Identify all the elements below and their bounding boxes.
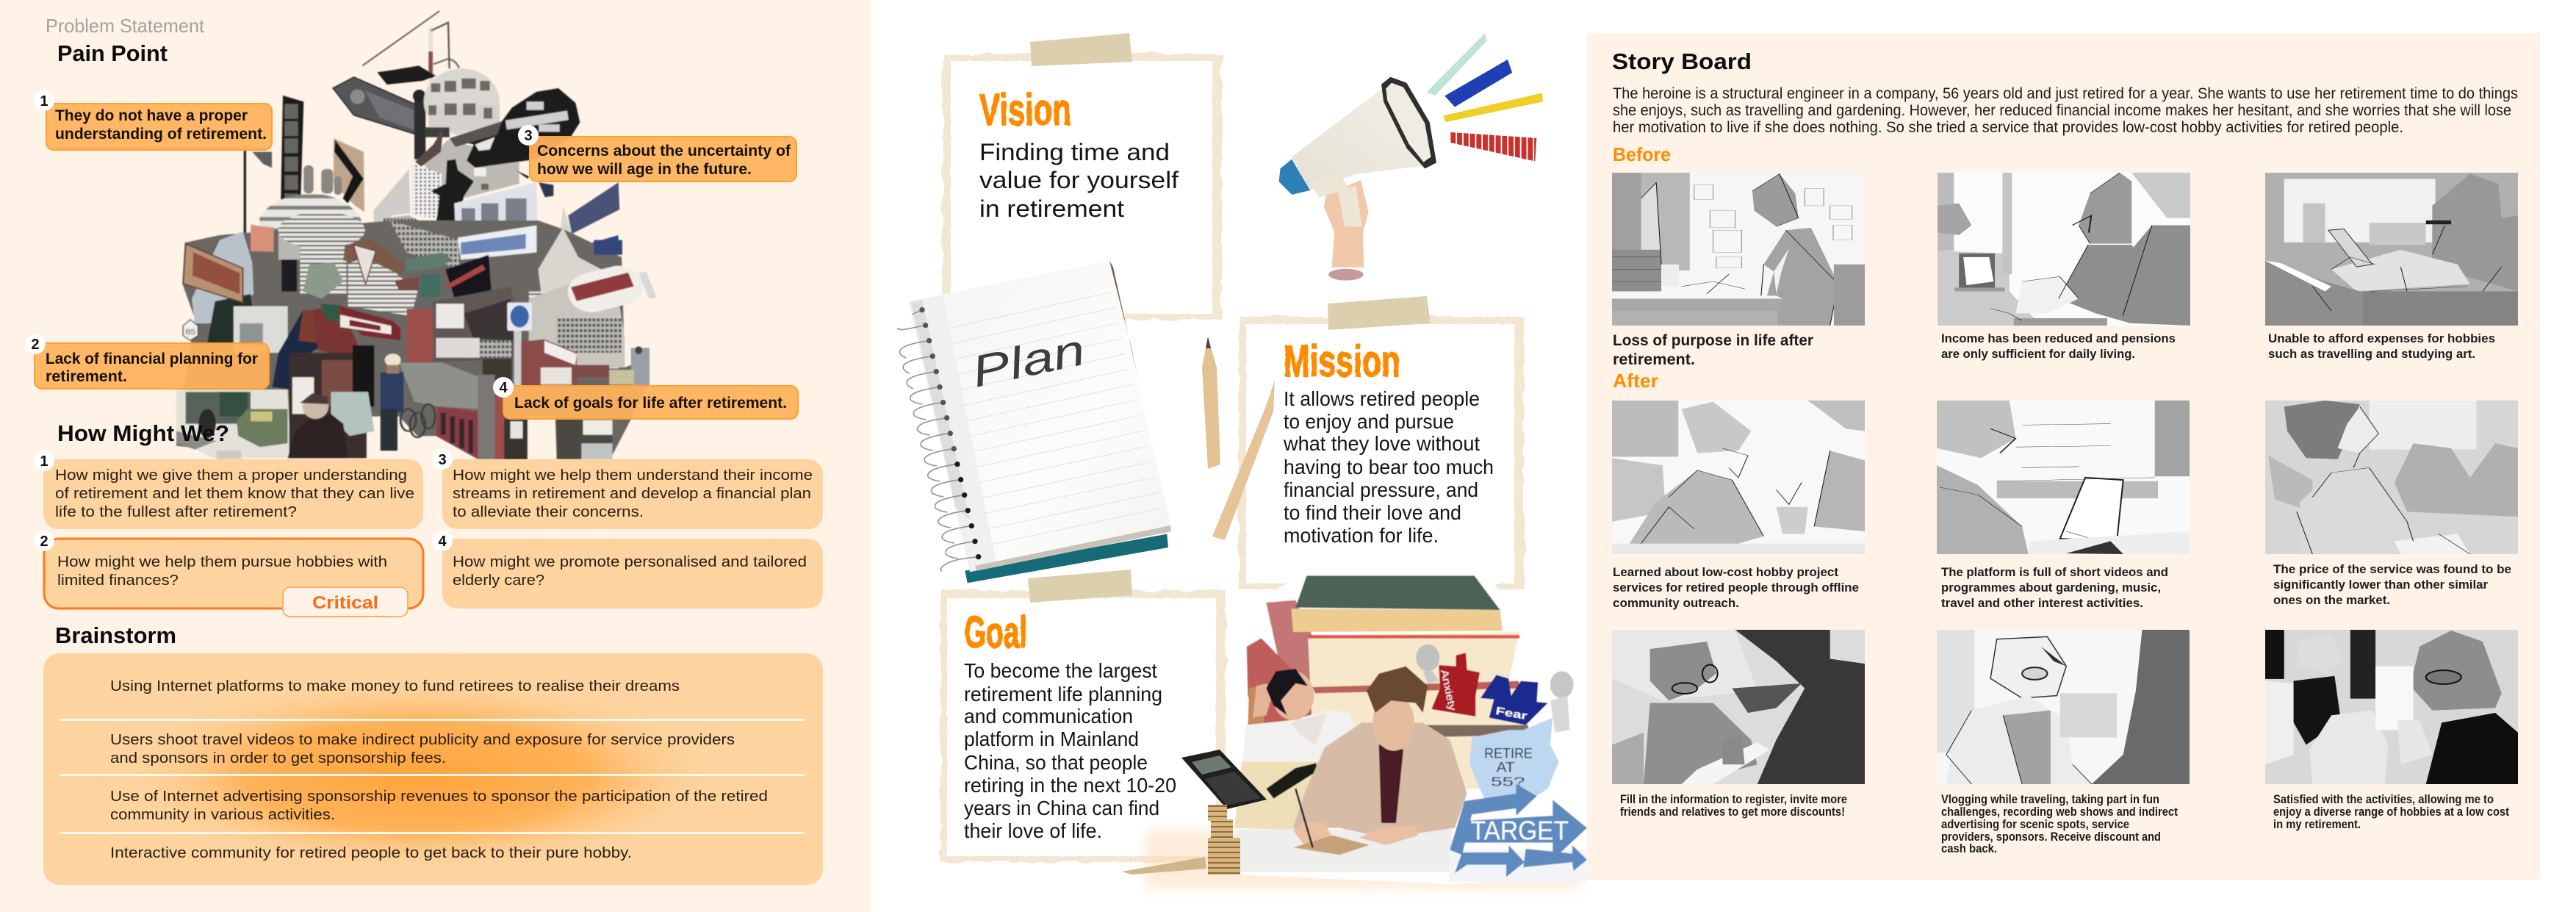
caption [1941,566,2168,610]
caption [1941,793,2178,855]
HMW card 3: 3 [438,452,447,468]
callout 4: Lack of goals for life after retirement. [514,395,787,412]
intro text: The heroine is a structural engineer in a company, 56 years old and just retired for a year. She wants to use her retirement time to do things [1613,85,2518,102]
intro text: her motivation to live if she does nothing. So she tried a service that provides low-cost hobby activities for retired people. [1613,119,2403,136]
caption [2273,563,2511,607]
illustration: books, people and goals collage [1146,573,1587,889]
icon: spiral notebook with Plan [897,261,1172,583]
piggy bank: retire at 55: AT [1497,761,1515,776]
callout 1: 1 [40,93,48,109]
caption: travel and other interest activities. [1941,597,2143,610]
body: retirement life planning [964,683,1162,705]
panel: brainstorm ideas [43,610,823,912]
sketch frame: after 3 [2265,401,2518,554]
section label: Problem Statement: Problem Statement [46,15,205,37]
icon: megaphone [1279,33,1543,281]
black sign [450,88,580,168]
grey building below black sign [424,140,519,201]
caption [2273,793,2509,831]
body: retiring in the next 10-20 [964,774,1176,797]
callout 3: 3 [524,128,533,144]
caption: Vlogging while traveling, taking part in fun [1941,793,2159,806]
HMW card 1: 1 [40,453,48,470]
sketch frame: after 5 [1937,630,2190,784]
HMW card 2 critical: limited finances? [57,572,179,589]
caption: Learned about low-cost hobby project [1613,566,1839,579]
icon: calculator [1181,750,1267,809]
body: their love of life. [964,819,1102,842]
caption: friends and relatives to get more discounts! [1620,805,1845,819]
heading: Pain Point: Pain Point [57,40,168,66]
callout 3: how we will age in the future. [537,161,752,178]
puzzle piece: Anxiety: Anxiety [1439,669,1458,711]
callout 2: Lack of financial planning for [46,351,258,367]
HMW card 4 [432,531,823,608]
caption [1613,566,1859,610]
body: To become the largest [964,659,1157,682]
arrows: target: TARGET [1471,816,1569,846]
callout 1: They do not have a proper [55,107,248,124]
left panel background [0,0,871,912]
panel: brainstorm ideas: Using Internet platforms to make money to fund retirees to realise their dreams [110,678,680,694]
sketch frame: after 6 [2265,630,2518,784]
heading: Story Board: Story Board [1612,49,1752,74]
paper card: Mission [1239,296,1524,589]
caption: Satisfied with the activities, allowing me to [2273,793,2494,806]
caption: significantly lower than other similar [2273,578,2489,592]
caption [1620,793,1847,819]
HMW card 1: of retirement and let them know that they can live [55,485,414,502]
caption: Fill in the information to register, invite more [1620,793,1847,806]
woman thinking [1243,669,1357,762]
HMW card 2 critical: 2 [40,534,48,550]
critical badge: Critical [312,593,378,613]
collage upper part [244,11,619,250]
body: Finding time and [979,139,1170,165]
intro text: she enjoys, such as travelling and gardening. However, her reduced financial income makes her hesitant, and she worries that she will lose [1613,102,2511,119]
caption: in my retirement. [2273,818,2361,831]
puzzle piece: Anxiety [1416,644,1480,717]
puzzle piece: Fear [1481,671,1574,733]
HMW card 3 [432,449,823,529]
body: motivation for life. [1284,524,1439,547]
callout 2: retirement. [46,368,127,385]
title: Mission [1284,337,1400,386]
spiral binding [897,310,979,572]
sketch frame: after 4 [1612,630,1865,784]
icon: pencils [1202,337,1275,540]
HMW card 4: How might we promote personalised and tailored [453,553,807,570]
callout 4 [493,377,798,419]
puzzle piece: Fear: Fear [1494,705,1528,722]
callout 4: 4 [499,380,508,396]
label: After: After [1613,370,1658,392]
caption: ones on the market. [2273,594,2390,607]
body: value for yourself [979,167,1179,193]
caption: Unable to afford expenses for hobbies [2268,332,2495,345]
road sign 85: 85 [185,328,195,337]
body: having to bear too much [1284,456,1494,478]
body: years in China can find [964,797,1159,819]
paper card: Vision [943,33,1222,320]
caption: community outreach. [1613,597,1739,610]
road sign 85 [183,320,198,340]
body: what they love without [1283,432,1480,455]
callout 1: understanding of retirement. [55,126,267,143]
callout 2 [25,334,269,389]
HMW card 4: 4 [438,534,447,550]
body: It allows retired people [1284,387,1480,410]
body [979,139,1179,222]
sketch frame: after 2 [1937,401,2190,554]
heading: Brainstorm: Brainstorm [55,622,176,648]
round tower [424,68,500,134]
caption: The platform is full of short videos and [1941,566,2168,579]
caption: challenges, recording web shows and indirect [1941,805,2178,819]
soldier [431,159,474,229]
black vertical sign [281,96,303,222]
body: in retirement [979,195,1124,222]
HMW card 2 critical [34,531,423,617]
panel: brainstorm ideas: community in various activities. [110,806,335,823]
caption: such as travelling and studying art. [2268,348,2475,361]
sign: blue white large [454,182,538,235]
panel: brainstorm ideas: and sponsors in order to get sponsorship fees. [110,750,446,766]
caption [1613,332,1813,368]
caption: Loss of purpose in life after [1613,332,1813,349]
HMW card 3: to alleviate their concerns. [453,503,644,520]
intro text [1613,85,2518,136]
callout 2: 2 [31,337,40,353]
heading: How Might We?: How Might We? [57,420,229,446]
HMW card 1: life to the fullest after retirement? [55,503,297,520]
paper card: Goal [940,570,1226,862]
panel: brainstorm ideas: Use of Internet advertising sponsorship revenues to sponsor the participation of the retired [110,788,768,805]
body: to find their love and [1284,501,1461,524]
sketch frame: before 1 [1612,173,1865,326]
piggy bank: retire at 55: 55? [1491,774,1525,789]
handwriting: Plan [968,325,1089,397]
label: Before: Before [1613,143,1671,165]
collage lower part [176,212,657,459]
caption: cash back. [1941,842,1997,855]
body: financial pressure, and [1284,478,1478,501]
round building [303,165,342,195]
caption: services for retired people through offline [1613,581,1859,595]
HMW card 3: streams in retirement and develop a financial plan [453,485,811,502]
panel: brainstorm ideas: Interactive community for retired people to get back to their pure hobby. [110,844,632,861]
caption: retirement. [1613,351,1695,368]
HMW card 2 critical: How might we help them pursue hobbies with [57,553,387,570]
soft peach shadow [1146,830,1580,889]
arrows: target [1450,784,1587,882]
sketch frame: after 1 [1612,401,1865,554]
body: China, so that people [964,751,1148,774]
sketch frame: before 3 [2265,173,2518,326]
body: platform in Mainland [964,728,1139,750]
caption: Income has been reduced and pensions [1941,332,2176,345]
critical badge [283,587,408,617]
callout 3: Concerns about the uncertainty of [537,143,791,159]
piggy bank: retire at 55: RETIRE [1484,747,1533,762]
HMW card 1 [34,450,423,529]
caption: are only sufficient for daily living. [1941,348,2135,361]
collage: city signs and buildings [176,11,657,459]
caption [1941,332,2176,361]
caption: advertising for scenic spots, service [1941,818,2129,831]
callout 1 [34,90,272,150]
caption: The price of the service was found to be [2273,563,2511,576]
piggy bank: retire at 55 [1469,718,1559,801]
papers, pen, desk [1234,762,1319,830]
body: to enjoy and pursue [1284,410,1454,433]
HMW card 3: How might we help them understand their income [453,467,813,484]
HMW card 4: elderly care? [453,572,544,589]
sketch frame: before 2 [1938,173,2190,326]
caption: providers, sponsors. Receive discount and [1941,830,2161,844]
HMW card 1: How might we give them a proper understanding [55,467,407,484]
body: and communication [964,705,1133,728]
caption: programmes about gardening, music, [1941,581,2161,595]
callout 3 [518,125,796,182]
title: Goal [964,608,1027,657]
man writing [1293,667,1467,855]
chevron sign [334,138,364,212]
body [1283,387,1494,547]
caption: enjoy a diverse range of hobbies at a low cost [2273,805,2509,819]
panel: brainstorm ideas: Users shoot travel videos to make indirect publicity and exposure for service providers [110,731,735,748]
body [964,659,1176,842]
title: Vision [979,85,1071,134]
icon: coin stacks [1122,805,1240,875]
panel: storyboard [1587,33,2540,880]
caption [2268,332,2495,361]
